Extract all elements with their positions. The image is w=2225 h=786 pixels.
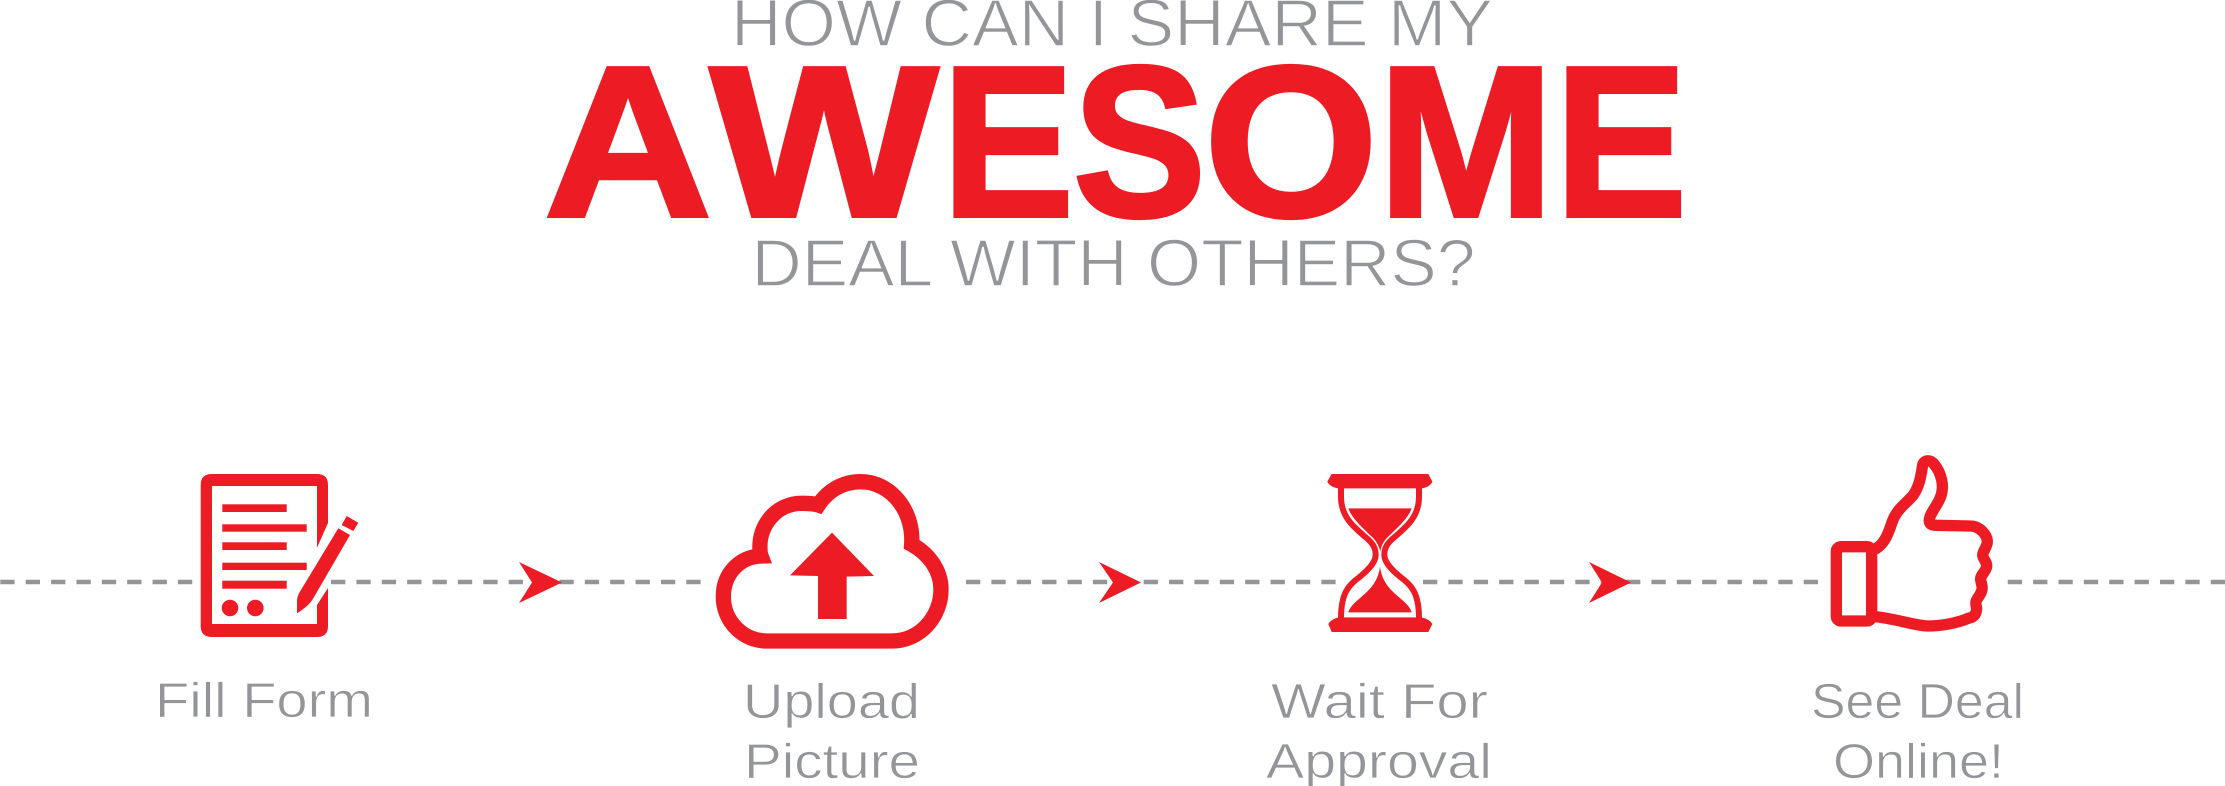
label: See Deal Online!: See Deal [1811,675,2024,729]
icon: thumbs up [1836,461,1987,626]
label: Wait For Approval [1266,675,1492,786]
label: See Deal Online! [1811,675,2024,786]
heading: AWESOME: E [1555,21,1687,262]
label: Upload Picture [743,675,920,786]
icon: hourglass [1327,474,1432,632]
heading: AWESOME: E [942,21,1074,262]
arrow 3 [1589,562,1631,603]
icon: form with pencil [201,474,358,637]
icon: cloud upload [723,482,941,641]
label: Upload Picture: Upload [743,675,920,729]
heading: AWESOME: S [1073,21,1206,262]
heading: AWESOME: W [710,21,938,262]
label: Fill Form: Fill Form [155,674,373,728]
heading: AWESOME: M [1378,21,1554,262]
heading: AWESOME: A [544,21,712,262]
label: Wait For Approval: Wait For [1271,675,1488,729]
arrow 2 [1099,562,1141,603]
heading line 3: DEAL WITH OTHERS? [752,226,1476,301]
heading: AWESOME: O [1204,21,1378,262]
arrow 1 [519,562,562,603]
